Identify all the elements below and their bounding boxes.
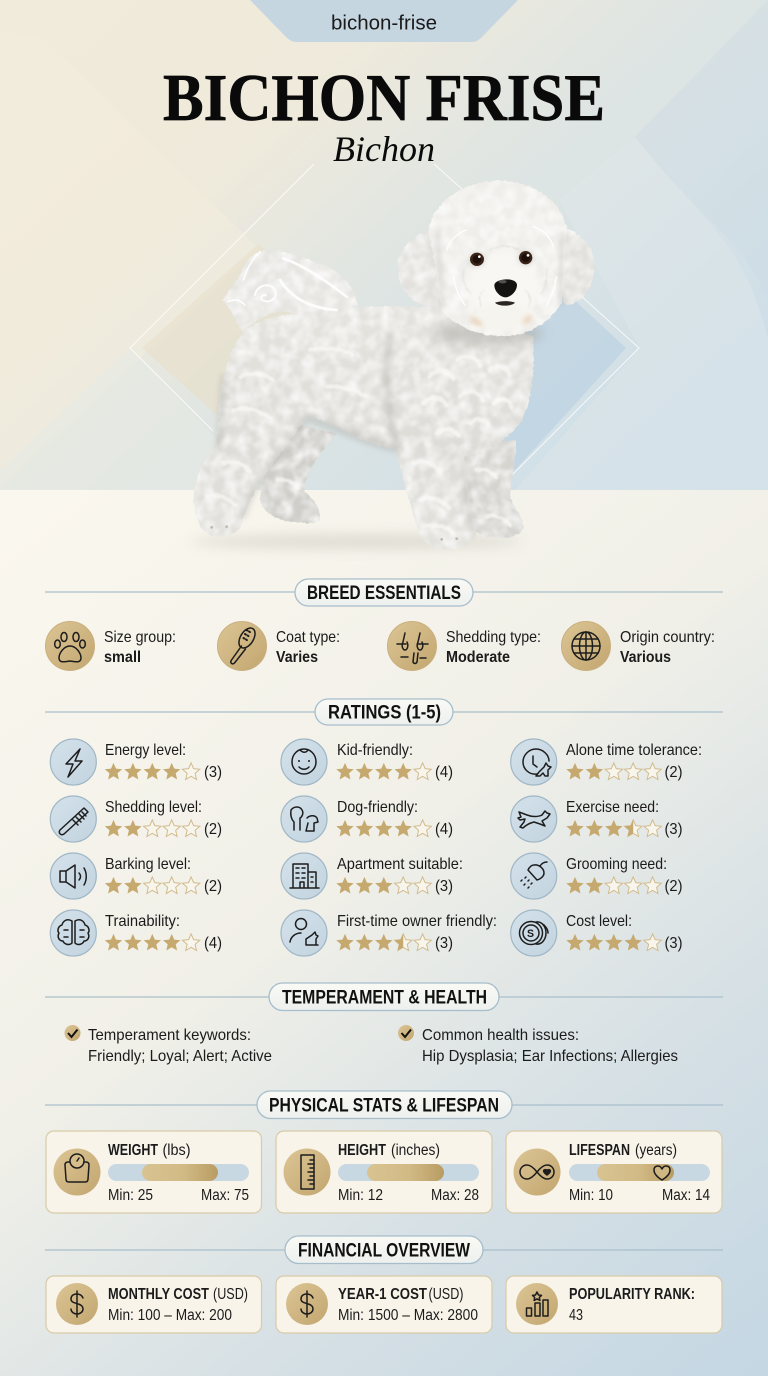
card: year-1 cost <box>276 1276 492 1333</box>
card: lifespan: Max: 14 <box>662 1187 710 1204</box>
rating: alone time tolerance: Alone time tolerance: <box>566 742 702 759</box>
rating: shedding level: (2) <box>204 821 222 838</box>
rating: alone time tolerance <box>511 739 702 785</box>
rating: barking level: Barking level: <box>105 856 191 873</box>
rating: dog-friendly: (4) <box>435 821 453 838</box>
rating: kid-friendly <box>281 739 453 785</box>
section: physical stats and lifespan: PHYSICAL STATS & LIFESPAN <box>269 1096 499 1116</box>
rating: alone time tolerance: (2) <box>664 764 682 781</box>
card: lifespan <box>506 1131 722 1213</box>
section: financial overview: FINANCIAL OVERVIEW <box>298 1240 470 1262</box>
rating: apartment suitable <box>281 853 463 899</box>
ear shadow separating ear and head <box>438 233 563 307</box>
rating: energy level: Energy level: <box>105 742 186 759</box>
rating: dog-friendly <box>281 796 453 842</box>
card: weight: (lbs) <box>162 1142 190 1159</box>
card: popularity rank: POPULARITY RANK: <box>569 1286 695 1303</box>
essential: origin country <box>562 622 715 670</box>
rating: trainability: Trainability: <box>105 913 180 930</box>
top tab: slug <box>250 0 518 42</box>
card: lifespan: LIFESPAN <box>569 1142 630 1159</box>
essential: coat type: Varies <box>276 649 318 666</box>
rating: first-time owner friendly <box>281 910 497 956</box>
head <box>428 181 567 336</box>
rating: energy level: (3) <box>204 764 222 781</box>
temperament keywords: Temperament keywords: <box>88 1027 251 1044</box>
rating: grooming need: Grooming need: <box>566 856 667 873</box>
card: monthly cost: MONTHLY COST <box>108 1286 209 1303</box>
essential: coat type <box>218 622 340 670</box>
rating: barking level <box>50 853 222 899</box>
paw details <box>210 525 458 541</box>
card: monthly cost: Min: 100 – Max: 200 <box>108 1307 232 1324</box>
temperament keywords <box>64 1025 272 1065</box>
card: lifespan: Min: 10 <box>569 1187 613 1204</box>
section: ratings <box>45 699 723 725</box>
rating: exercise need <box>511 796 682 842</box>
rating: barking level: (2) <box>204 878 222 895</box>
rating: first-time owner friendly: First-time owner friendly: <box>337 913 497 930</box>
title: BICHON FRISE <box>163 61 605 135</box>
card: monthly cost <box>46 1276 262 1333</box>
temperament keywords: Friendly; Loyal; Alert; Active <box>88 1048 272 1065</box>
essential: origin country: Origin country: <box>620 629 715 646</box>
rating: exercise need: (3) <box>664 821 682 838</box>
common health issues: Common health issues: <box>422 1027 579 1044</box>
rating: cost level: (3) <box>664 935 682 952</box>
card: popularity rank <box>506 1276 722 1333</box>
rating: grooming need <box>511 853 682 899</box>
essential: shedding type: Moderate <box>446 649 510 666</box>
section: breed essentials: BREED ESSENTIALS <box>307 583 461 604</box>
card: height <box>276 1131 492 1213</box>
rating: grooming need: (2) <box>664 878 682 895</box>
card: height: Min: 12 <box>338 1187 383 1204</box>
top tab: slug: bichon-frise <box>331 12 437 34</box>
card: weight: Max: 75 <box>201 1187 249 1204</box>
essential: size group: small <box>104 649 141 666</box>
illustration: white bichon frise dog <box>190 181 594 549</box>
rating: cost level: S <box>527 928 534 940</box>
neck shadow under head <box>430 320 543 347</box>
card: popularity rank: 43 <box>569 1307 583 1324</box>
section: financial overview <box>45 1236 723 1264</box>
common health issues: Hip Dysplasia; Ear Infections; Allergies <box>422 1048 678 1065</box>
rating: cost level <box>511 910 682 956</box>
card: lifespan: (years) <box>635 1142 677 1159</box>
essential: size group: Size group: <box>104 629 176 646</box>
section: temperament and health: TEMPERAMENT & HEALTH <box>282 988 487 1008</box>
rating: cost level: Cost level: <box>566 913 632 930</box>
body shading <box>218 337 473 530</box>
rating: apartment suitable: Apartment suitable: <box>337 856 463 873</box>
card: year-1 cost: Min: 1500 – Max: 2800 <box>338 1307 478 1324</box>
rating: shedding level <box>50 796 222 842</box>
section: ratings: RATINGS (1-5) <box>328 702 441 724</box>
essential: shedding type: Shedding type: <box>446 629 541 646</box>
card: weight: Min: 25 <box>108 1187 153 1204</box>
rating: kid-friendly: Kid-friendly: <box>337 742 413 759</box>
essential: shedding type <box>388 622 541 670</box>
essential: size group <box>46 622 176 670</box>
section: physical stats and lifespan <box>45 1091 723 1118</box>
essential: coat type: Coat type: <box>276 629 340 646</box>
card: year-1 cost: YEAR-1 COST <box>338 1286 427 1303</box>
rating: first-time owner friendly: (3) <box>435 935 453 952</box>
essential: origin country: Various <box>620 649 671 666</box>
rating: energy level <box>50 739 222 785</box>
card: height: (inches) <box>391 1142 440 1159</box>
ears <box>397 228 594 307</box>
subtitle: Bichon <box>333 129 435 169</box>
fur highlights <box>207 348 512 533</box>
section: breed essentials <box>45 579 723 606</box>
rating: trainability: (4) <box>204 935 222 952</box>
rating: kid-friendly: (4) <box>435 764 453 781</box>
card: weight: WEIGHT <box>108 1142 158 1159</box>
rating: exercise need: Exercise need: <box>566 799 659 816</box>
card: height: Max: 28 <box>431 1187 479 1204</box>
card: monthly cost: (USD) <box>213 1286 248 1303</box>
tail strands <box>228 252 347 310</box>
section: temperament and health <box>45 983 723 1010</box>
card: year-1 cost: (USD) <box>428 1286 464 1303</box>
muzzle and face <box>447 227 557 330</box>
rating: shedding level: Shedding level: <box>105 799 202 816</box>
rating: apartment suitable: (3) <box>435 878 453 895</box>
rating: dog-friendly: Dog-friendly: <box>337 799 418 816</box>
rating: trainability <box>50 910 222 956</box>
card: height: HEIGHT <box>338 1142 386 1159</box>
common health issues <box>398 1025 678 1065</box>
card: weight <box>46 1131 262 1213</box>
